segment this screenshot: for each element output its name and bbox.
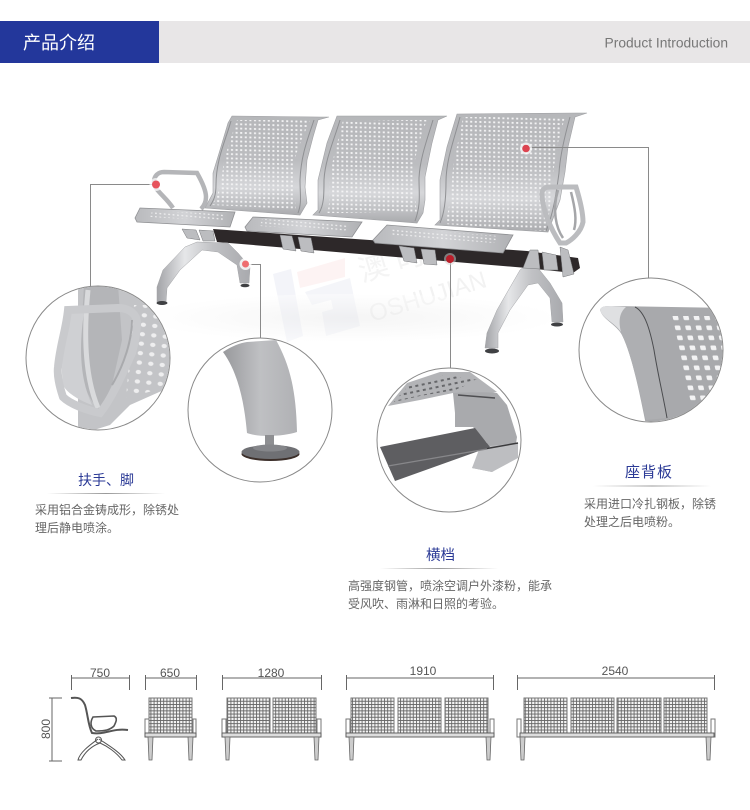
leader lines (90, 148, 648, 368)
left armrest (154, 172, 206, 209)
perforated back panel (78, 288, 170, 430)
elevation 1910 (346, 664, 494, 760)
elevation 1280 (222, 666, 322, 760)
watermark characters: 澳 时 (354, 237, 429, 289)
steel tube (380, 428, 490, 481)
heading: 扶手、脚 (78, 472, 134, 488)
back panel (600, 306, 730, 425)
description: 理后静电喷涂。 (35, 520, 119, 535)
header background (159, 21, 750, 63)
detail circle: foot (188, 338, 332, 482)
elevation 1280: 1280 (258, 666, 285, 680)
height dimension (49, 698, 62, 761)
seat brackets (182, 229, 574, 277)
armrest loop (58, 308, 137, 413)
floor shadow (140, 294, 560, 342)
seat back middle (313, 116, 447, 223)
leg tube (223, 340, 297, 436)
dimension drawings (39, 664, 715, 761)
right leg (485, 266, 563, 354)
watermark text: OSHUJIAN (366, 266, 490, 328)
seat underside (388, 372, 497, 406)
rule (47, 493, 165, 494)
crossbar (213, 229, 580, 273)
height label: 800 (39, 719, 53, 739)
header title tab (0, 21, 159, 63)
chair legs (78, 739, 125, 760)
elevation 1910: 1910 (410, 664, 437, 678)
panel seam (635, 307, 667, 418)
watermark (273, 237, 490, 342)
perforations (672, 316, 722, 400)
header bar (0, 21, 750, 63)
seat back right (435, 113, 587, 232)
description: 高强度钢管，喷涂空调户外漆粉，能承 (348, 578, 552, 593)
detail circle: crossbar (377, 368, 521, 512)
seat back left (205, 116, 329, 215)
description: 采用进口冷扎钢板，除锈 (584, 496, 716, 511)
description: 采用铝合金铸成形，除锈处 (35, 502, 179, 517)
three seat bench (135, 113, 587, 354)
width label: 750 (90, 666, 110, 680)
heading: 横档 (426, 547, 455, 564)
elevation 650: 650 (160, 666, 180, 680)
left leg (156, 242, 250, 305)
adjuster stem (265, 435, 274, 445)
bracket casting (453, 392, 517, 472)
title: 产品介绍 (23, 33, 95, 53)
subtitle: Product Introduction (605, 36, 728, 50)
marker dots (150, 142, 532, 270)
elevation 650 (145, 666, 196, 760)
side strip (622, 334, 635, 374)
right armrest (542, 187, 583, 243)
foot pad (242, 453, 300, 461)
width dimension (72, 675, 130, 690)
detail circle: seat back (579, 278, 730, 425)
detail circle: armrest (26, 285, 175, 435)
seat pad left (135, 208, 235, 227)
loop interior (62, 312, 92, 405)
side view (39, 666, 130, 761)
rule (380, 568, 498, 569)
callout: armrest and feet (35, 472, 179, 535)
callout: seat back (584, 463, 716, 529)
description: 受风吹、雨淋和日照的考验。 (348, 596, 504, 611)
chair profile (71, 698, 128, 733)
seat pad middle (245, 217, 362, 237)
watermark logo (273, 258, 360, 342)
description: 处理之后电喷粉。 (584, 515, 680, 529)
rule (593, 486, 711, 487)
elevation 2540 (517, 664, 715, 760)
heading: 座背板 (625, 463, 673, 481)
seat pad right (373, 225, 513, 253)
inner frame (80, 285, 122, 410)
curved top edge (600, 306, 626, 332)
callout: crossbar (348, 547, 552, 611)
elevation 2540: 2540 (602, 664, 629, 678)
